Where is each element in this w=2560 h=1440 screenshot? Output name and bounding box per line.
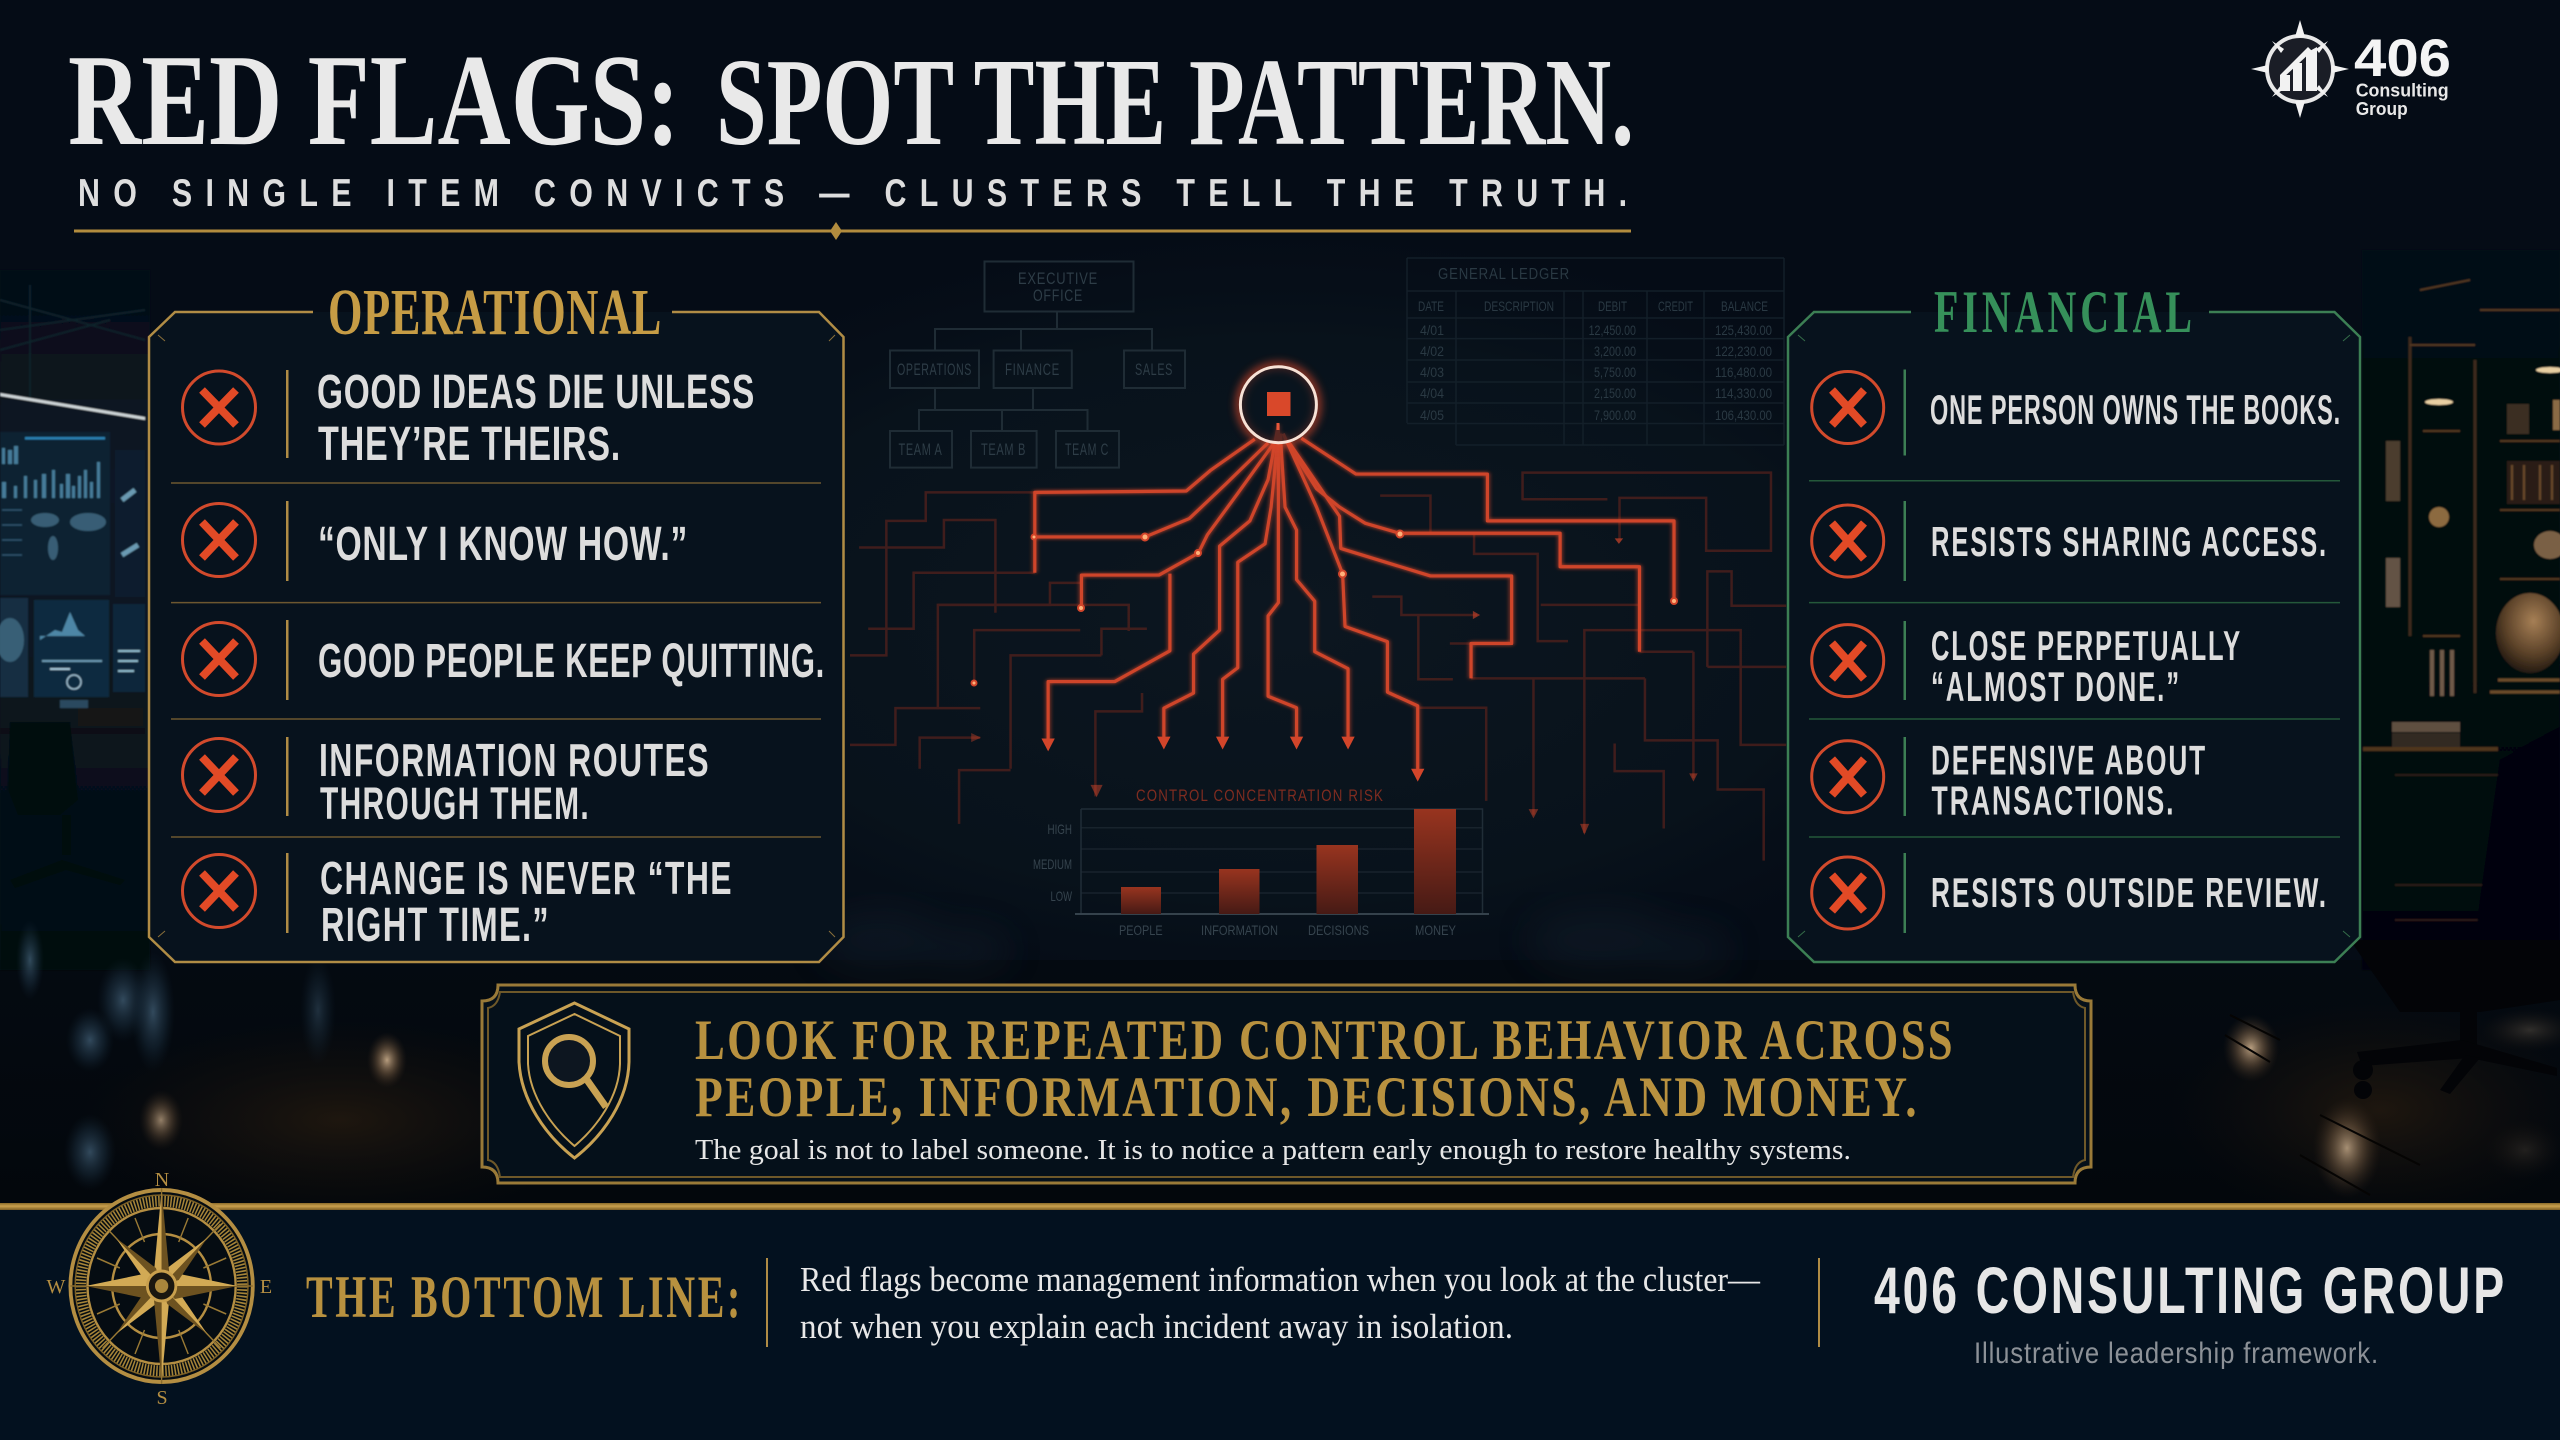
subtitle: NO SINGLE ITEM CONVICTS — CLUSTERS TELL THE TRUTH.	[78, 171, 1627, 215]
panel: financial	[1788, 279, 2360, 962]
item: close perpetually: “ALMOST DONE.”	[1931, 663, 2181, 710]
footer note: Illustrative leadership framework.	[1974, 1337, 2379, 1370]
item: good ideas: GOOD IDEAS DIE UNLESS	[317, 366, 755, 419]
item: change	[182, 852, 733, 952]
logo	[2251, 20, 2451, 119]
panel: operational	[149, 276, 844, 962]
callout heading: PEOPLE, INFORMATION, DECISIONS, AND MONEY.	[695, 1066, 1919, 1129]
bar chart: control concentration risk: CONTROL CONCENTRATION RISK	[1136, 786, 1384, 805]
general ledger table: 4/04	[1420, 385, 1444, 401]
general ledger table: 4/02	[1420, 343, 1444, 359]
bar chart: control concentration risk: LOW	[1050, 888, 1073, 904]
general ledger table: 116,480.00	[1715, 364, 1772, 380]
left background scene: operations room with dashboards	[0, 270, 150, 970]
bar chart: control concentration risk: DECISIONS	[1308, 922, 1369, 938]
general ledger table: 2,150.00	[1594, 385, 1636, 401]
org chart: FINANCE	[1005, 360, 1060, 379]
general ledger table: 7,900.00	[1594, 407, 1636, 423]
central node	[1239, 366, 1317, 444]
general ledger table: CREDIT	[1658, 298, 1693, 314]
callout heading	[695, 1009, 1955, 1129]
center diagram	[820, 258, 1786, 970]
title	[68, 28, 1634, 173]
org chart	[890, 262, 1185, 468]
bar chart: control concentration risk: PEOPLE	[1119, 922, 1163, 938]
footer divider 1	[766, 1258, 768, 1347]
footer band	[0, 1203, 2560, 1440]
general ledger table: BALANCE	[1721, 298, 1768, 314]
bar chart: control concentration risk: INFORMATION	[1201, 922, 1278, 938]
item: only I know how	[182, 501, 688, 581]
org chart: TEAM A	[898, 440, 942, 459]
logo: 406	[2354, 29, 2451, 88]
general ledger table: 125,430.00	[1715, 322, 1772, 338]
item: information routes: THROUGH THEM.	[320, 778, 590, 829]
title divider	[74, 222, 1631, 240]
general ledger table: 3,200.00	[1594, 343, 1636, 359]
item: only I know how: “ONLY I KNOW HOW.”	[318, 518, 688, 571]
item: good people: GOOD PEOPLE KEEP QUITTING.	[318, 635, 825, 688]
red control lines from central node	[1035, 424, 1674, 770]
bottom line text: Red flags become management information when you look at the cluster—	[800, 1260, 1761, 1299]
item: resists sharing	[1812, 501, 2328, 581]
org chart: TEAM C	[1065, 440, 1109, 459]
org chart: OPERATIONS	[897, 360, 972, 379]
compass letters	[47, 1169, 272, 1409]
bar chart: control concentration risk: MEDIUM	[1033, 856, 1072, 872]
floor reflections	[16, 920, 2560, 1220]
general ledger table: DEBIT	[1598, 298, 1627, 314]
item: one person	[1812, 370, 2341, 456]
item: change: CHANGE IS NEVER “THE	[320, 852, 733, 904]
junction dots	[972, 530, 1677, 686]
item: information routes	[182, 734, 710, 829]
callout body: The goal is not to label someone. It is to notice a pattern early enough to restore healthy systems.	[695, 1134, 1851, 1166]
callout banner	[482, 985, 2091, 1183]
item: defensive: DEFENSIVE ABOUT	[1931, 736, 2207, 784]
org chart: EXECUTIVE	[1018, 269, 1098, 288]
general ledger table: 106,430.00	[1715, 407, 1772, 423]
bottom line text	[800, 1260, 1761, 1346]
bottom line text: not when you explain each incident away in isolation.	[800, 1307, 1513, 1346]
general ledger table: 114,330.00	[1715, 385, 1772, 401]
general ledger table: GENERAL LEDGER	[1438, 266, 1570, 283]
item: resists outside review: RESISTS OUTSIDE REVIEW.	[1931, 869, 2328, 916]
general ledger table: DESCRIPTION	[1484, 298, 1554, 314]
item: defensive	[1812, 736, 2207, 824]
compass letters: N	[155, 1169, 169, 1191]
logo: Group	[2356, 99, 2408, 119]
logo: Consulting	[2356, 80, 2449, 100]
general ledger table: 12,450.00	[1589, 322, 1636, 338]
icon: logo compass	[2251, 20, 2349, 118]
item: change: RIGHT TIME.”	[321, 899, 550, 952]
item: information routes: INFORMATION ROUTES	[319, 734, 710, 786]
org chart: TEAM B	[981, 440, 1026, 459]
compass letters: E	[260, 1276, 272, 1298]
org chart: SALES	[1135, 360, 1173, 379]
general ledger table: 4/03	[1420, 364, 1444, 380]
arrowheads	[971, 538, 1698, 835]
callout heading: LOOK FOR REPEATED CONTROL BEHAVIOR ACROSS	[695, 1009, 1955, 1072]
item: close perpetually: CLOSE PERPETUALLY	[1931, 622, 2242, 669]
general ledger table: DATE	[1418, 298, 1444, 314]
general ledger table: 5,750.00	[1594, 364, 1636, 380]
icon: compass rose	[70, 1188, 253, 1384]
bar chart: control concentration risk: HIGH	[1048, 821, 1072, 837]
right office chair base	[2350, 940, 2560, 1099]
footer divider 2	[1818, 1258, 1820, 1347]
general ledger table: 4/05	[1420, 407, 1444, 423]
item: good ideas: THEY’RE THEIRS.	[318, 418, 621, 471]
icon: shield with magnifier	[519, 1003, 629, 1158]
title: RED FLAGS:	[68, 28, 680, 173]
heading: operational: OPERATIONAL	[328, 276, 662, 349]
compass letters: W	[47, 1276, 66, 1298]
bar chart: control concentration risk: MONEY	[1415, 922, 1457, 938]
bottom line label: THE BOTTOM LINE:	[306, 1264, 743, 1330]
item: resists outside review	[1812, 853, 2328, 933]
bar chart: control concentration risk	[1033, 786, 1489, 938]
org chart: OFFICE	[1033, 286, 1083, 305]
smoke	[820, 910, 1730, 970]
item: good ideas	[182, 366, 755, 471]
item: good people	[182, 620, 825, 700]
compass letters: S	[156, 1387, 168, 1409]
general ledger table: 4/01	[1420, 322, 1444, 338]
heading: financial: FINANCIAL	[1934, 279, 2196, 345]
title: SPOT THE PATTERN.	[716, 34, 1634, 172]
dim background network lines	[850, 473, 1786, 861]
general ledger table: 122,230.00	[1715, 343, 1772, 359]
general ledger table	[1407, 258, 1784, 445]
right background scene: library with globe	[2362, 250, 2560, 986]
item: defensive: TRANSACTIONS.	[1932, 778, 2176, 824]
item: close perpetually	[1812, 621, 2242, 710]
